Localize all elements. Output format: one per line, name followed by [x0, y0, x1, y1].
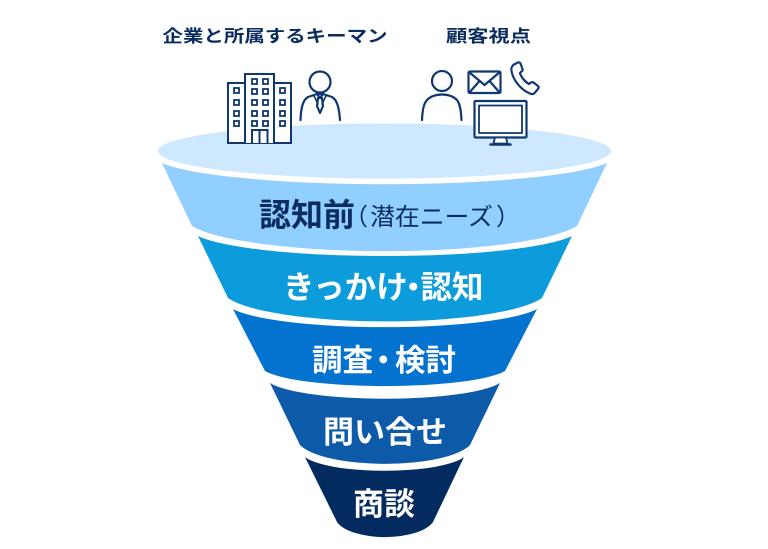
- icon: customer: [422, 71, 462, 120]
- icon: envelope: [468, 72, 500, 93]
- heading: company and key people: 企業と所属するキーマン: [162, 26, 388, 46]
- label: trigger and awareness: 認知: [420, 269, 484, 305]
- label: research and evaluation: 調査: [312, 344, 373, 378]
- label: business negotiation: 商談: [353, 487, 415, 522]
- label: research and evaluation: 検討: [395, 344, 456, 378]
- funnel band: before awareness: [162, 163, 607, 251]
- icon: telephone: [511, 62, 539, 94]
- heading: customer perspective: 顧客視点: [446, 26, 531, 46]
- label: before awareness (latent needs): 潜在ニーズ: [370, 204, 493, 231]
- funnel band: research and evaluation: [233, 309, 537, 386]
- label: trigger and awareness: きっかけ: [283, 269, 408, 305]
- label: inquiry: 問い合せ: [323, 415, 447, 450]
- funnel top ellipse: [158, 124, 611, 178]
- funnel band: trigger and awareness: [198, 236, 572, 321]
- label: before awareness (latent needs): （: [344, 204, 368, 231]
- label: trigger and awareness: ・: [398, 269, 429, 305]
- icon: businessman: [300, 72, 340, 120]
- label: before awareness (latent needs): 認知前: [259, 197, 355, 233]
- label: before awareness (latent needs): ）: [496, 204, 520, 231]
- icon: office building: [228, 74, 291, 143]
- label: research and evaluation: ・: [368, 344, 398, 378]
- funnel band: business negotiation: [305, 457, 464, 537]
- icon: monitor: [474, 101, 526, 144]
- funnel band: inquiry: [270, 383, 500, 464]
